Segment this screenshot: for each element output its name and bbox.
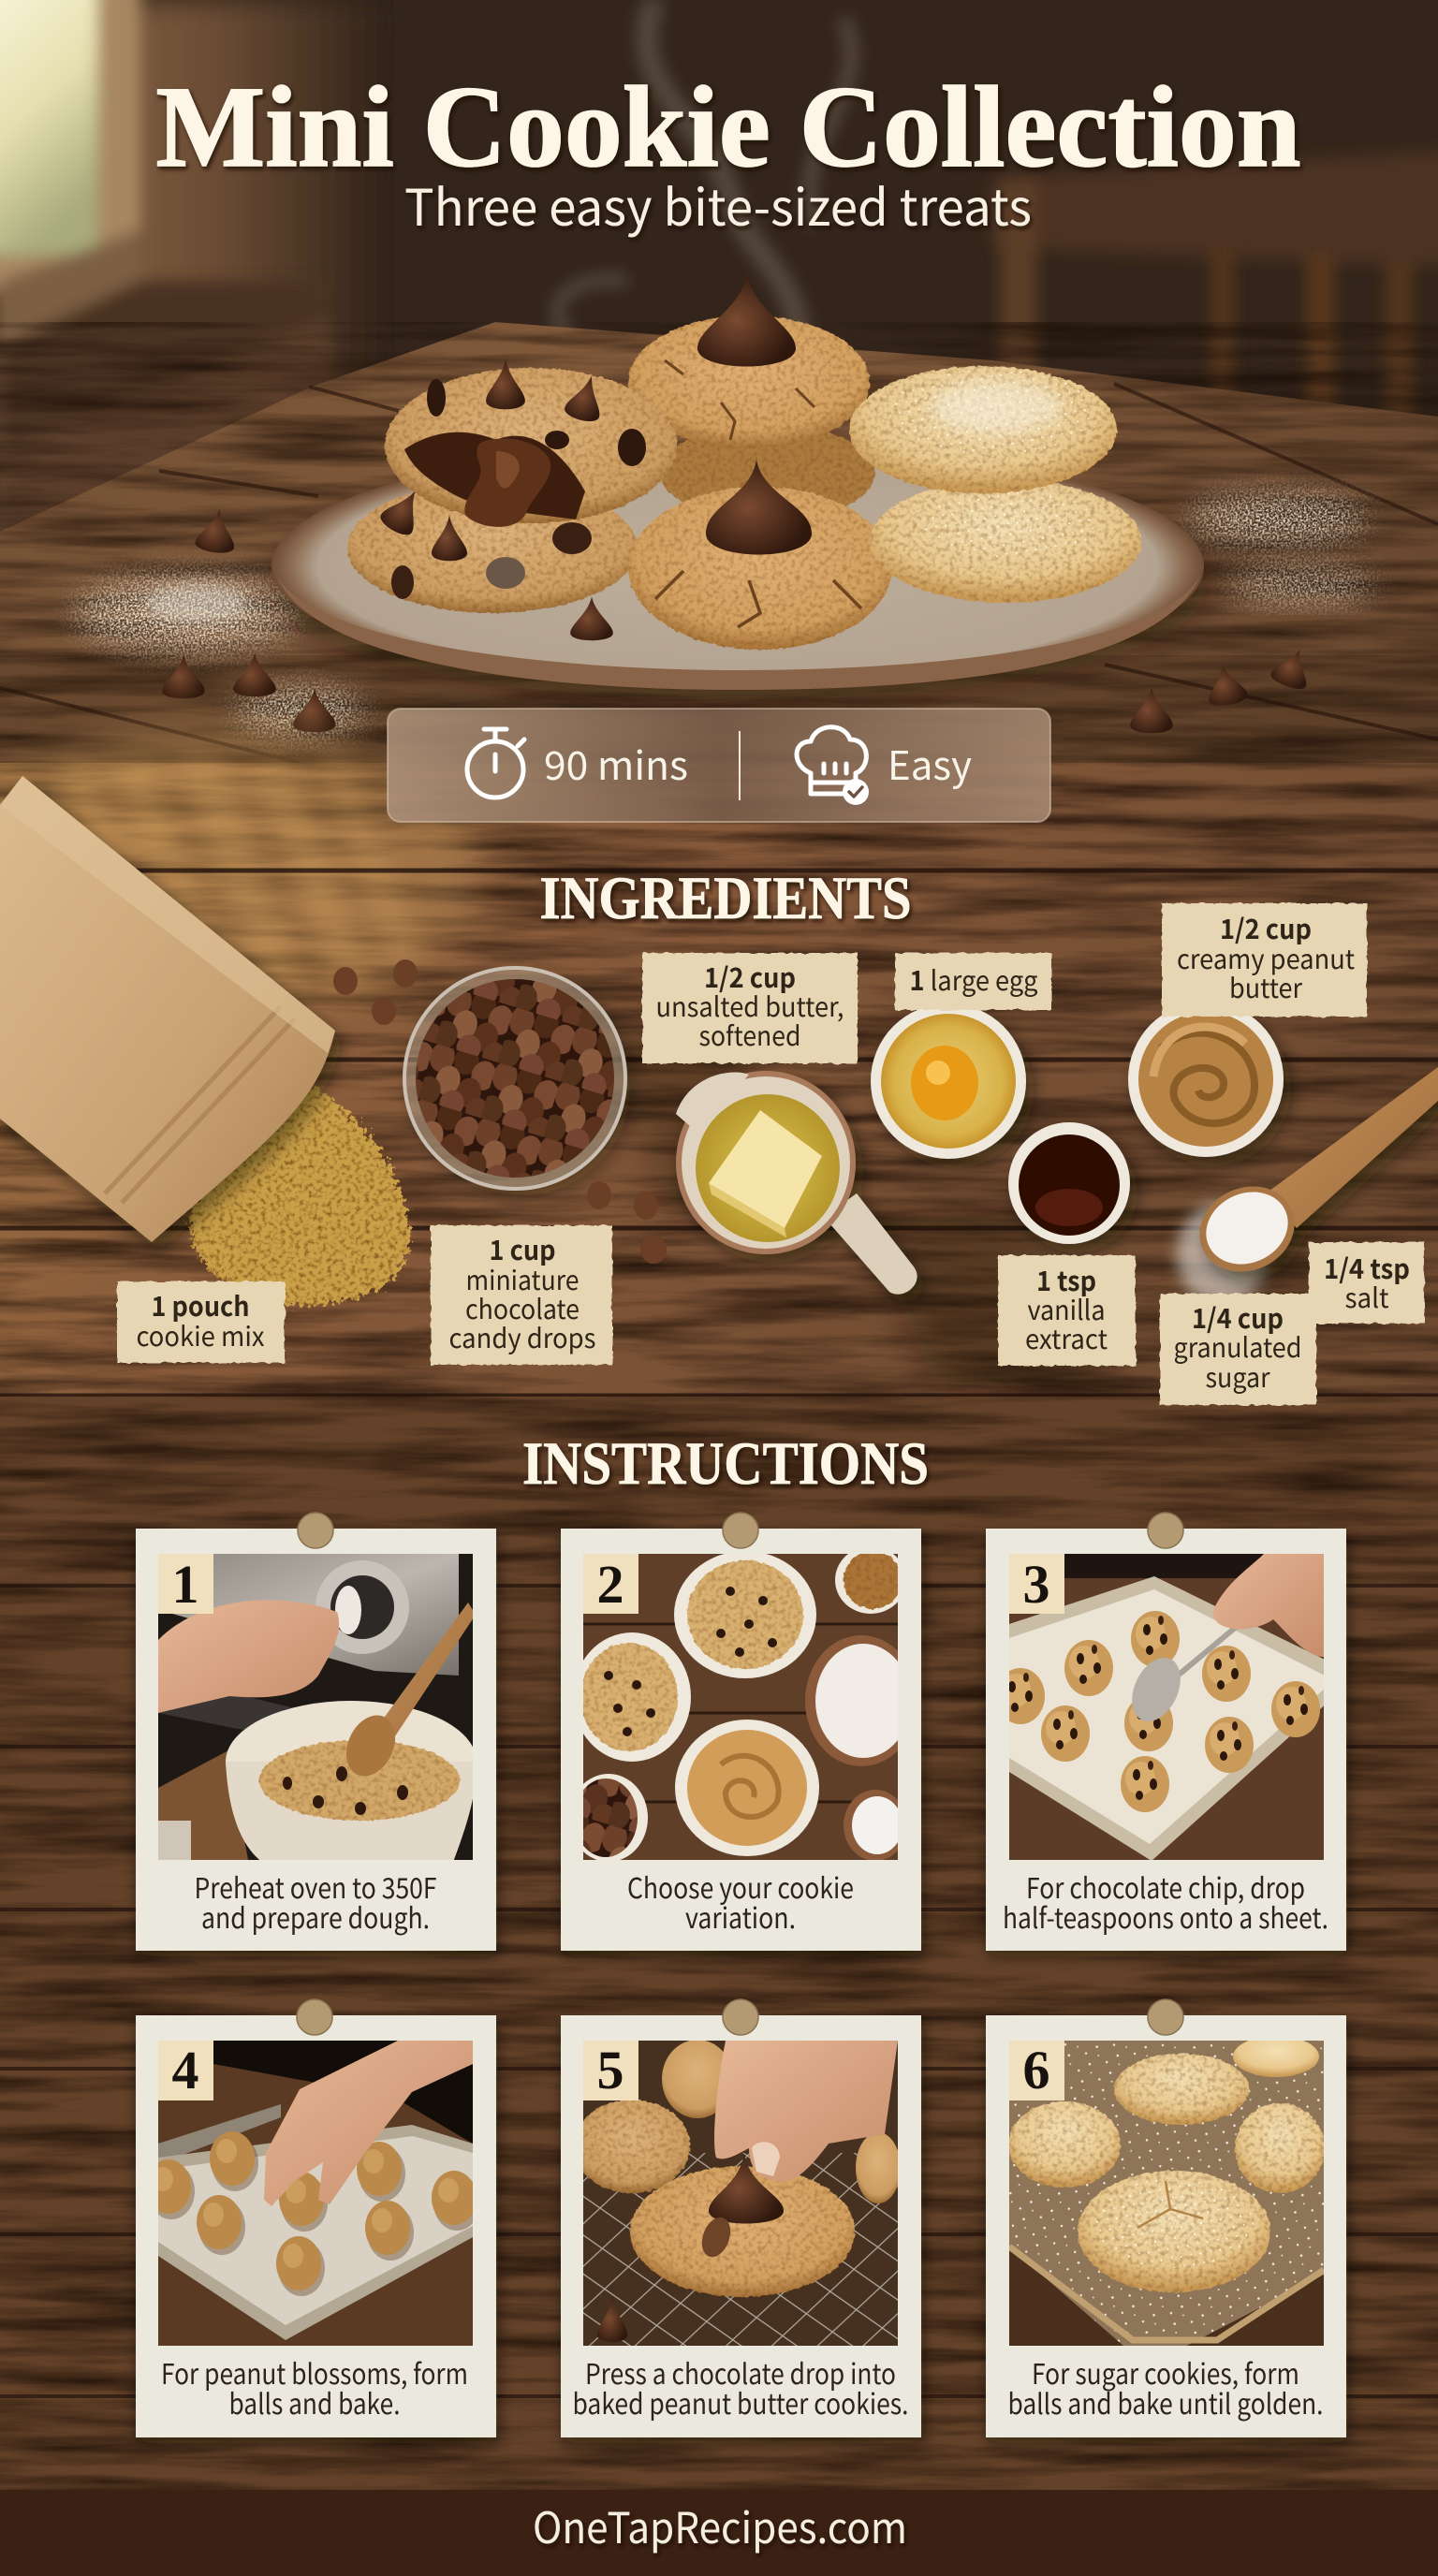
pin 5 <box>723 1999 758 2035</box>
cookie: sugar bottom <box>870 479 1141 603</box>
subtitle: Three easy bite-sized treats <box>404 167 1032 241</box>
chair <box>992 150 1438 421</box>
label: 1/4 cup granulated sugar <box>1160 1294 1316 1405</box>
badge 4 <box>158 2040 213 2100</box>
photo: forming dough balls on sheet <box>146 2041 480 2346</box>
label: 1/2 cup unsalted butter softened: 1/2 cup <box>704 957 796 996</box>
caption 2: Choose your cookie <box>627 1866 854 1907</box>
label: 1 cup miniature chocolate candy drops <box>431 1225 612 1365</box>
badge 1 <box>158 1554 213 1615</box>
caption 1 <box>195 1866 436 1937</box>
label: 1/2 cup creamy peanut butter: 1/2 cup <box>1220 908 1312 947</box>
ingredient: peanut butter bowl <box>1128 1002 1284 1157</box>
pin 4 <box>297 1999 332 2035</box>
caption 2: variation. <box>685 1895 796 1937</box>
label: 1/2 cup creamy peanut butter: creamy peanut <box>1177 938 1355 977</box>
ingredient: kraft bag <box>0 776 335 1242</box>
label: 1/2 cup creamy peanut butter: butter <box>1229 967 1303 1006</box>
label: 1/4 tsp salt: 1/4 tsp <box>1324 1248 1410 1287</box>
label: 1 cup miniature chocolate candy drops: 1 cup <box>489 1229 556 1268</box>
caption 3: half-teaspoons onto a sheet. <box>1003 1895 1328 1937</box>
badge 5 <box>583 2040 638 2100</box>
cookie: chocolate chip bottom <box>347 481 638 613</box>
label: 1 tsp vanilla extract: vanilla <box>1028 1289 1105 1328</box>
label: 1/4 cup granulated sugar: 1/4 cup <box>1192 1297 1284 1337</box>
step card 2 <box>561 1513 921 1951</box>
badge 6: 6 <box>1022 2040 1050 2100</box>
badge 6 <box>1009 2040 1064 2100</box>
label: 1 large egg <box>895 953 1051 1010</box>
label: 1 cup miniature chocolate candy drops: miniature <box>466 1259 579 1298</box>
ingredient: butter measuring cup <box>676 1071 917 1295</box>
label: 1/4 cup granulated sugar: granulated <box>1174 1326 1301 1366</box>
label: 1/4 tsp salt: salt <box>1344 1277 1389 1316</box>
pin 3 <box>1148 1513 1183 1548</box>
panel: instructions wood background <box>0 1397 1438 2492</box>
caption 4: balls and bake. <box>228 2381 401 2422</box>
cookie: sugar top <box>849 366 1117 493</box>
caption 6 <box>1007 2351 1324 2422</box>
label: 1/4 tsp salt <box>1309 1242 1424 1324</box>
caption 4 <box>161 2351 468 2422</box>
ingredient: cookie mix powder <box>189 1076 410 1306</box>
label: 1/2 cup creamy peanut butter <box>1162 903 1367 1017</box>
label: 1 large egg: 1 large egg <box>910 959 1037 999</box>
photo: hand on oven dial with dough bowl <box>158 1554 477 1872</box>
pin 6 <box>1148 1999 1183 2035</box>
label: 1/2 cup unsalted butter softened: softened <box>698 1015 801 1054</box>
heading: ingredients: INGREDIENTS <box>539 865 912 932</box>
label: 1 pouch cookie mix: cookie mix <box>137 1315 264 1354</box>
caption 1: and prepare dough. <box>201 1895 430 1937</box>
photo: sugar cookies on baking sheet <box>1008 2036 1325 2349</box>
ingredient: chocolate chip bowl <box>404 968 625 1189</box>
ingredient: sugar and salt spoon <box>1177 1067 1438 1306</box>
butter pat <box>709 1110 822 1228</box>
badge 2 <box>583 1554 638 1615</box>
badge 2: 2 <box>597 1554 624 1615</box>
icon: stopwatch <box>467 729 524 798</box>
badge 3 <box>1009 1554 1064 1615</box>
label: 1/4 cup granulated sugar: sugar <box>1206 1356 1270 1396</box>
flour piles <box>75 495 1376 734</box>
cookie: peanut blossom top <box>628 274 870 448</box>
step card 6 <box>986 1999 1346 2437</box>
badge 1: 1 <box>172 1554 198 1615</box>
table <box>0 322 1438 768</box>
photo: bowls of dough and ingredients <box>569 1546 917 1862</box>
caption 2 <box>627 1866 854 1937</box>
label: 1 cup miniature chocolate candy drops: chocolate <box>465 1288 580 1327</box>
footer bar <box>0 2490 1438 2576</box>
footer text: OneTapRecipes.com <box>533 2495 907 2556</box>
difficulty text: Easy <box>888 735 972 792</box>
label: 1 tsp vanilla extract: extract <box>1025 1318 1108 1357</box>
time and difficulty pill <box>388 709 1050 822</box>
window <box>0 0 337 580</box>
step card 1 <box>136 1513 496 1951</box>
badge 4: 4 <box>172 2040 198 2100</box>
panel: ingredients wood background <box>0 721 1438 1399</box>
caption 1: Preheat oven to 350F <box>195 1866 436 1907</box>
steam <box>557 0 852 374</box>
caption 3 <box>1003 1866 1328 1937</box>
label: 1/2 cup unsalted butter softened <box>642 953 858 1063</box>
caption 5: Press a chocolate drop into <box>585 2351 896 2393</box>
step card 4 <box>136 1999 496 2437</box>
pin 2 <box>723 1513 758 1548</box>
caption 6: balls and bake until golden. <box>1007 2381 1324 2422</box>
photo: spooning dough onto sheet <box>996 1554 1357 1861</box>
caption 3: For chocolate chip, drop <box>1026 1866 1305 1907</box>
cookies: peanut butter back <box>662 432 876 507</box>
caption 4: For peanut blossoms, form <box>161 2351 468 2393</box>
caption 6: For sugar cookies, form <box>1032 2351 1299 2393</box>
pin 1 <box>298 1513 333 1548</box>
cookie: peanut blossom front <box>628 460 892 650</box>
label: 1 cup miniature chocolate candy drops: candy drops <box>449 1317 595 1356</box>
icon: chef hat <box>797 727 869 805</box>
label: 1 pouch cookie mix: 1 pouch <box>152 1285 249 1325</box>
badge 5: 5 <box>597 2040 624 2100</box>
step card 5 <box>561 1999 921 2437</box>
badge 3: 3 <box>1022 1554 1050 1615</box>
time text: 90 mins <box>544 735 688 792</box>
ingredient: vanilla bowl <box>1008 1122 1130 1244</box>
caption 5: baked peanut butter cookies. <box>573 2381 908 2422</box>
ingredient: egg bowl <box>871 1003 1026 1159</box>
label: 1 tsp vanilla extract: 1 tsp <box>1036 1260 1096 1299</box>
panel: hero kitchen scene <box>0 0 1438 768</box>
label: 1/2 cup unsalted butter softened: unsalted butter, <box>655 986 844 1025</box>
caption 5 <box>573 2351 908 2422</box>
cookie: chocolate chip bitten <box>385 359 677 527</box>
heading: instructions: INSTRUCTIONS <box>522 1430 929 1498</box>
plate <box>271 443 1206 700</box>
photo: pressing chocolate drop into cookie <box>574 2040 901 2346</box>
chocolate chips scattered <box>162 506 1317 733</box>
label: 1 tsp vanilla extract <box>998 1255 1136 1366</box>
title: Mini Cookie Collection <box>155 63 1301 191</box>
label: 1 pouch cookie mix <box>117 1281 285 1363</box>
step card 3 <box>986 1513 1357 1951</box>
loose chips <box>333 959 667 1264</box>
